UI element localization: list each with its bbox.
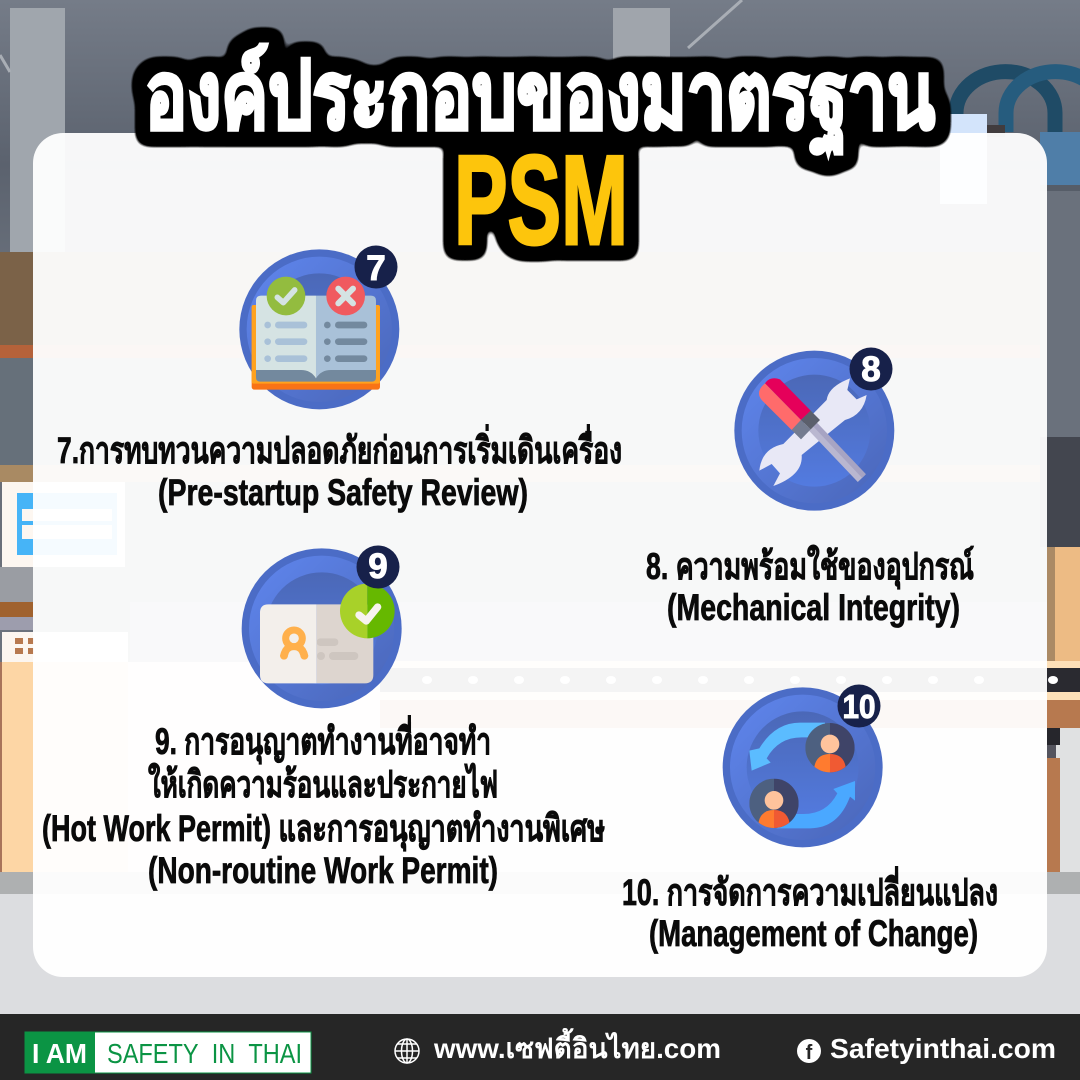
item 10 text: (Management of Change): [649, 913, 978, 954]
item 7 text: 7.การทบทวนความปลอดภัยก่อนการเริ่มเดินเครื่อง: [57, 424, 622, 471]
title line: PSM: PSM: [454, 129, 628, 271]
item 9 text: ให้เกิดความร้อนและประกายไฟ: [148, 762, 498, 805]
logo: I AM: [32, 1038, 87, 1069]
item 9 text: 9. การอนุญาตทำงานที่อาจทำ: [155, 715, 491, 765]
icon: globe: [395, 1039, 419, 1063]
badge 8: [850, 348, 892, 390]
item 9 text: [42, 715, 605, 891]
icon: facebook: [797, 1039, 821, 1064]
icon 10: change management arrows and people: [723, 687, 883, 847]
badge 7: 7: [366, 249, 386, 288]
logo: [25, 1032, 311, 1073]
item 9 text: (Hot Work Permit) และการอนุญาตทำงานพิเศษ: [42, 808, 605, 852]
item 8 text: [646, 544, 974, 628]
icon 7: open book with check and cross: [239, 249, 399, 409]
item 9 text: (Non-routine Work Permit): [148, 850, 498, 891]
item 7 text: (Pre-startup Safety Review): [158, 472, 528, 513]
badge 8: 8: [861, 350, 881, 389]
white content panel: [33, 133, 1047, 977]
footer bar: [0, 1014, 1080, 1080]
facebook page name: Safetyinthai.com: [830, 1033, 1056, 1064]
badge 10: 10: [842, 688, 876, 725]
badge 9: [356, 546, 400, 588]
icon 8: wrench and screwdriver: [734, 351, 894, 511]
logo: SAFETY IN THAI: [107, 1038, 302, 1069]
website: www.เซฟตี้อินไทย.com: [433, 1027, 721, 1064]
badge 9: 9: [368, 547, 388, 586]
item 7 text: [57, 424, 622, 513]
icon: facebook: f: [806, 1042, 813, 1064]
icon 9: permit card with check: [242, 548, 402, 708]
title: [145, 43, 935, 271]
item 10 text: [622, 866, 998, 954]
badge 7: [354, 246, 398, 288]
item 8 text: (Mechanical Integrity): [667, 587, 960, 628]
